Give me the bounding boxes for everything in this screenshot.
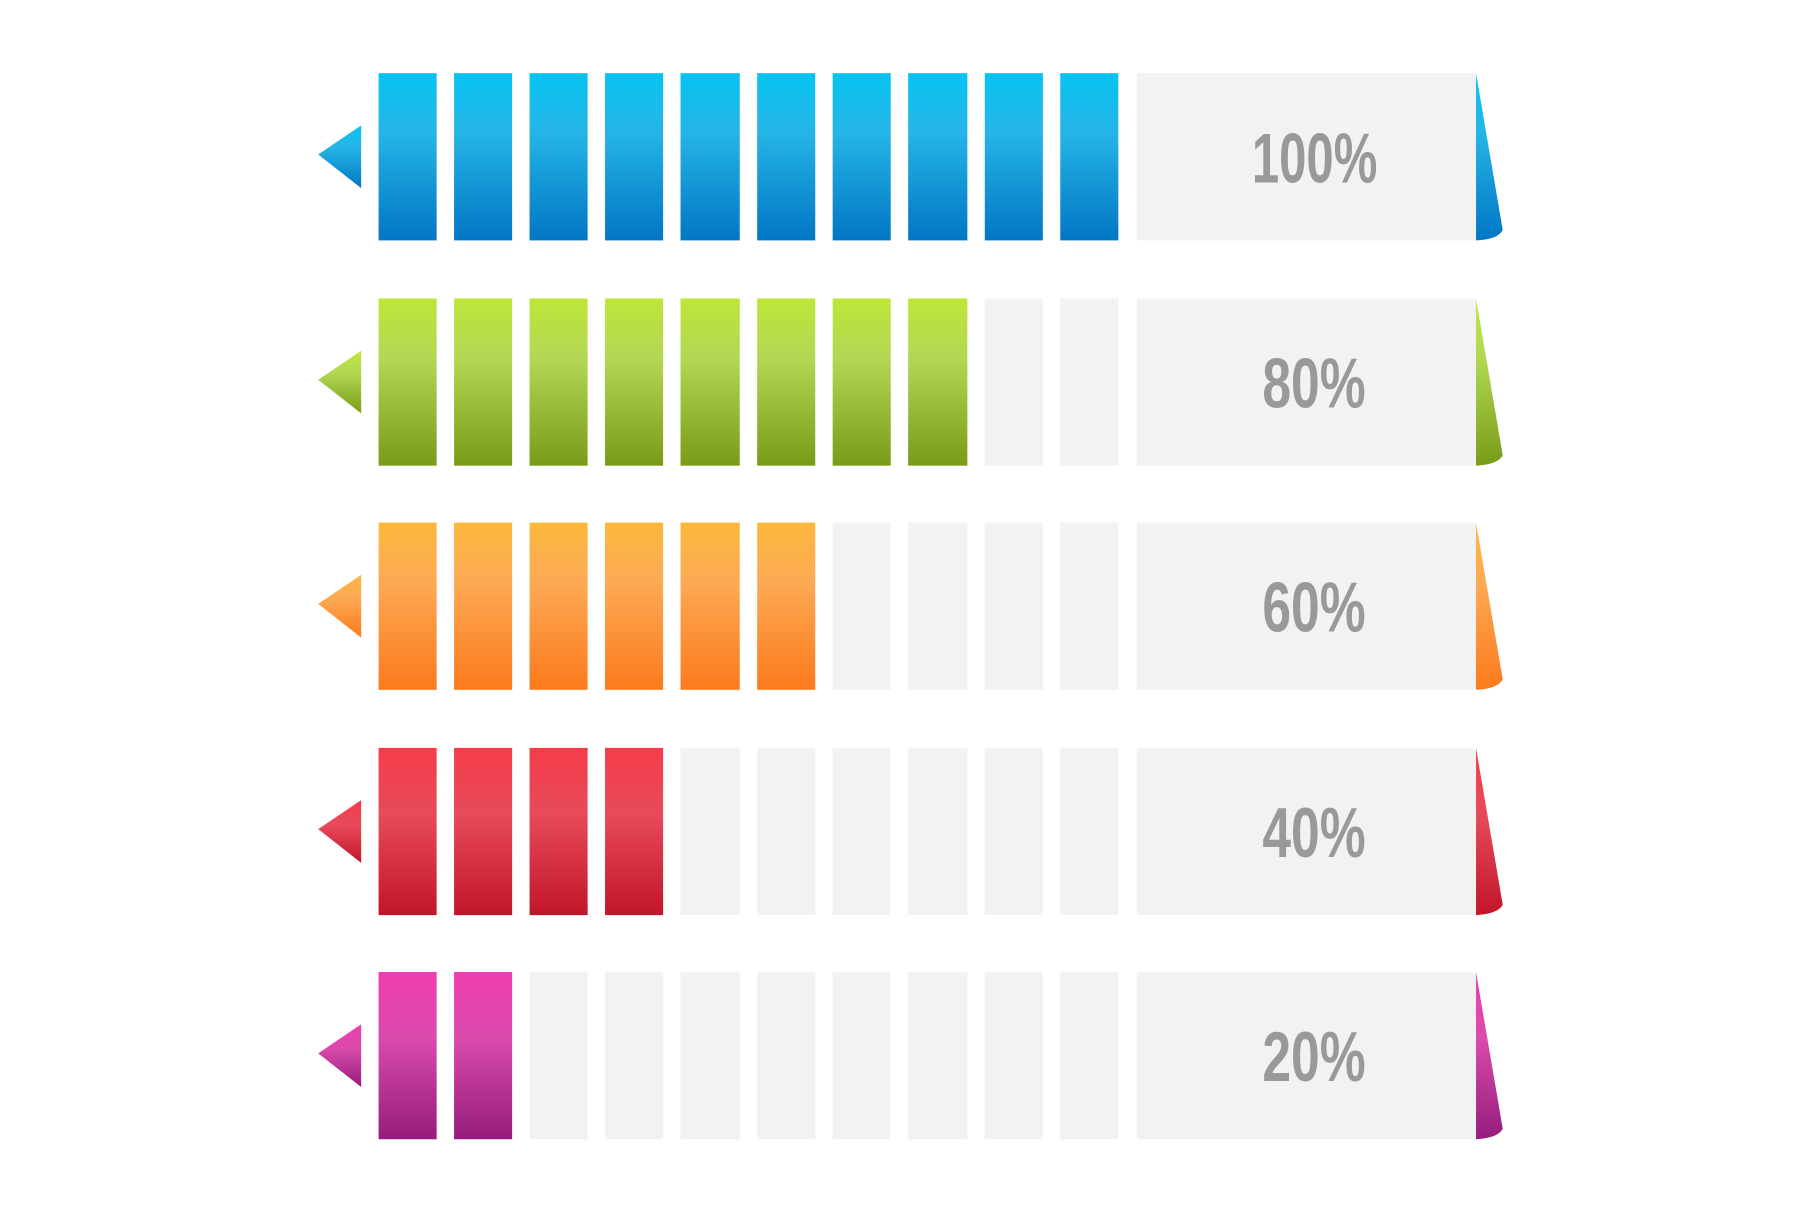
- icon: triangle pointer: [318, 351, 361, 413]
- label box: [1137, 523, 1476, 690]
- percentage label: 60%: [1262, 569, 1366, 648]
- icon: triangle pointer: [318, 125, 361, 188]
- percentage label: 20%: [1262, 1018, 1366, 1097]
- label box: [1137, 972, 1476, 1139]
- icon: triangle pointer: [318, 1024, 361, 1087]
- icon: triangle pointer: [318, 575, 361, 638]
- percentage label: 80%: [1262, 345, 1366, 424]
- bar segments: [379, 298, 1118, 466]
- ribbon tail: [1476, 748, 1503, 915]
- icon: triangle pointer: [318, 800, 361, 863]
- row: 60% orange: [318, 523, 1503, 690]
- bar segments: [379, 972, 1118, 1139]
- label box: [1137, 748, 1476, 915]
- bar segments: [379, 523, 1118, 690]
- ribbon tail: [1476, 298, 1503, 466]
- percentage label: 100%: [1252, 119, 1377, 198]
- row: 40% red: [318, 748, 1503, 915]
- label box: [1137, 73, 1476, 240]
- row: 100% blue: [318, 73, 1503, 240]
- row: 20% pink: [318, 972, 1503, 1139]
- label box: [1137, 298, 1476, 466]
- ribbon tail: [1476, 523, 1503, 690]
- percentage label: 40%: [1262, 794, 1366, 873]
- ribbon tail: [1476, 73, 1503, 240]
- bar segments: [379, 748, 1118, 915]
- bar segments: [379, 73, 1118, 240]
- row: 80% green: [318, 298, 1503, 466]
- ribbon tail: [1476, 972, 1503, 1139]
